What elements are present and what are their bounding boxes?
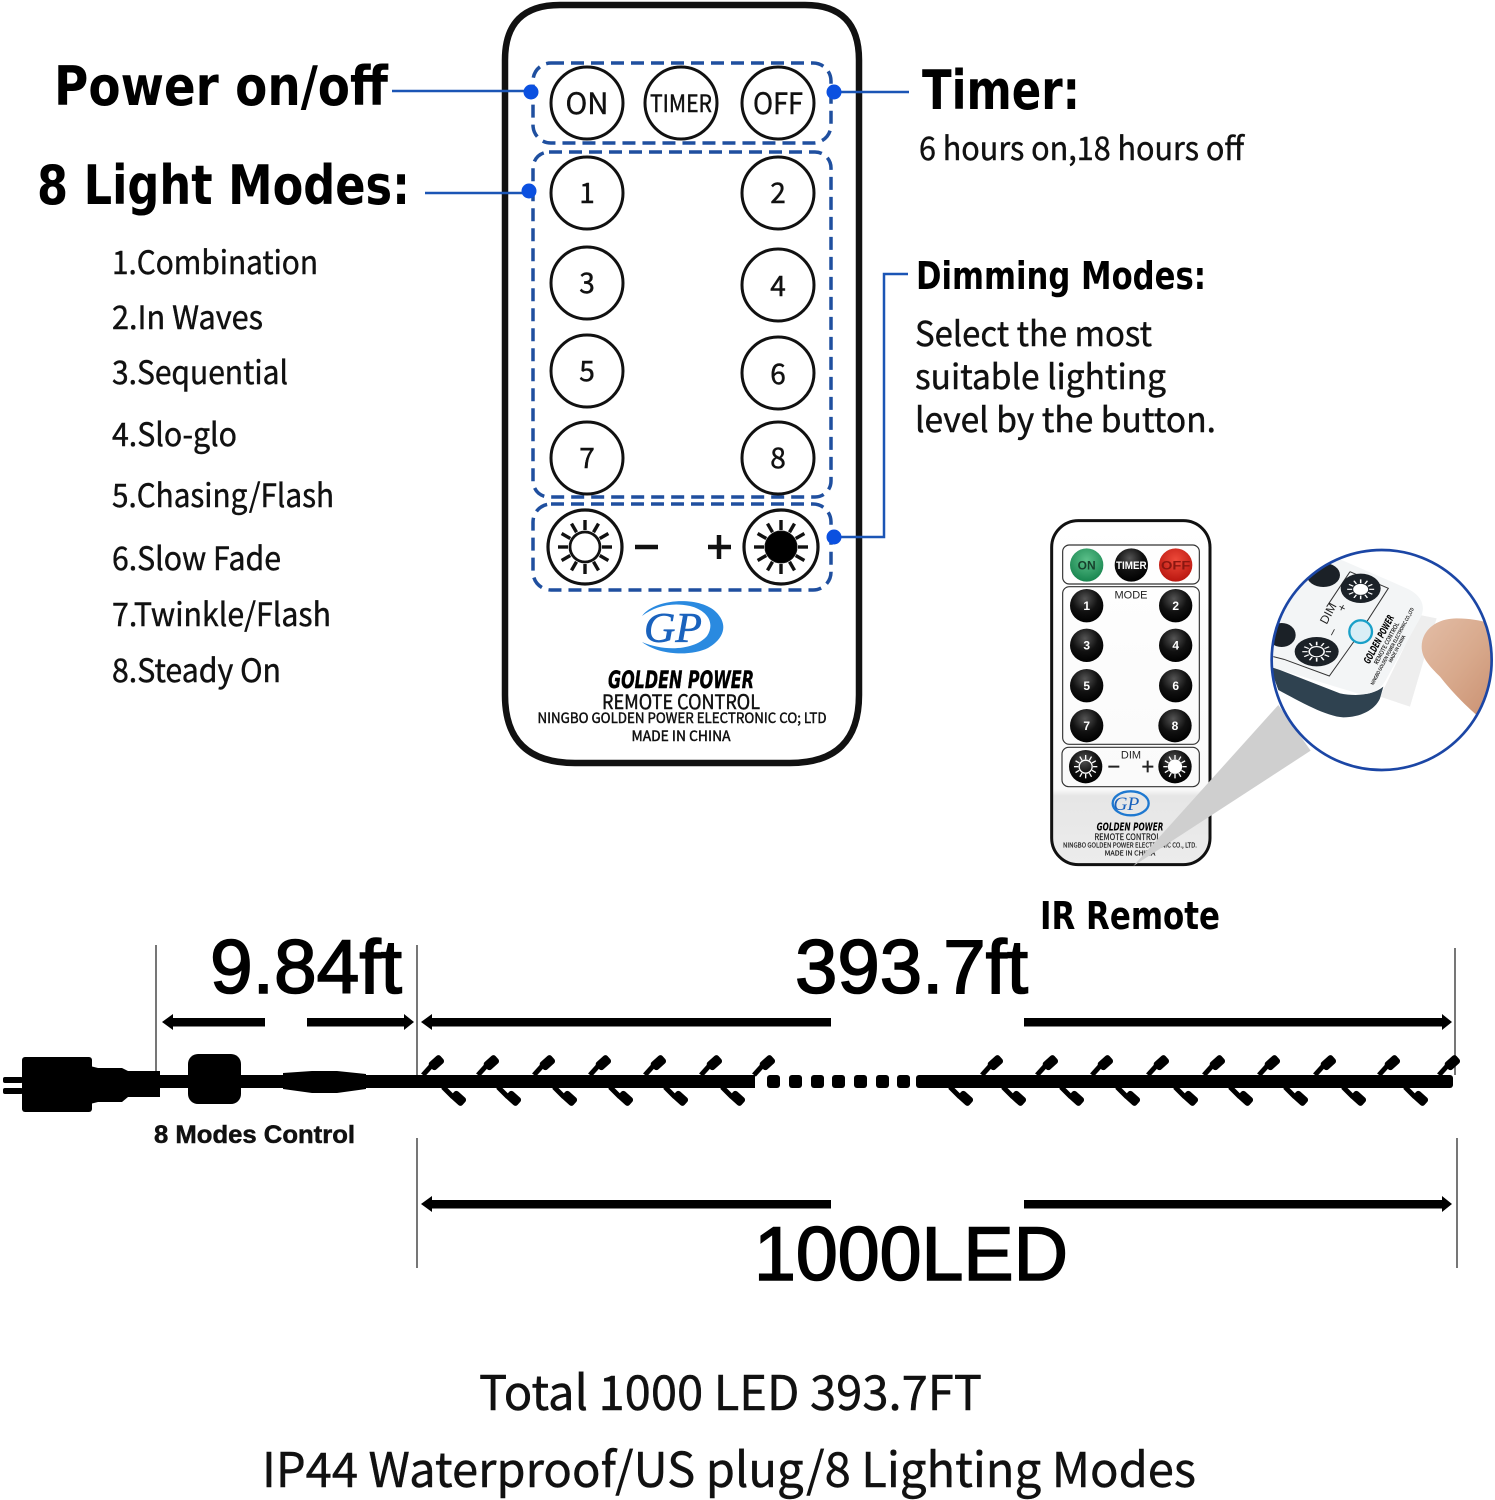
inset buttons — [1341, 574, 1381, 603]
button labels — [1078, 558, 1190, 761]
icon: dim up — [744, 510, 818, 584]
arrows: length dimension — [162, 1014, 1452, 1030]
brand text — [1063, 821, 1197, 857]
logo: GP — [642, 601, 723, 653]
power and timer buttons — [551, 67, 814, 139]
brand text: MADE IN CHINA — [1105, 847, 1156, 857]
mode numbers: 5 — [579, 350, 595, 390]
remote side — [1270, 667, 1383, 717]
list of light modes: 8.Steady On — [112, 646, 281, 692]
mode numbers: 7 — [579, 437, 595, 477]
mode numbers: 8 — [770, 437, 786, 477]
inset text: REMOTE CONTROL — [1371, 620, 1401, 666]
list of light modes: 6.Slow Fade — [112, 534, 281, 580]
dimming description: suitable lighting — [915, 350, 1166, 399]
button labels: 3 — [1083, 639, 1090, 653]
mode numbers — [579, 172, 786, 477]
inset panel — [1273, 572, 1388, 676]
power and timer labels: OFF — [753, 81, 803, 123]
dimming description: level by the button. — [915, 393, 1216, 442]
mode numbers: 4 — [770, 265, 786, 305]
button labels: 1 — [1083, 599, 1090, 613]
inset text — [1364, 608, 1414, 686]
mode numbers: 3 — [579, 262, 595, 302]
dimming description: Select the most — [915, 307, 1152, 356]
inset text: MADE IN CHINA — [1388, 634, 1407, 664]
control box — [188, 1054, 241, 1104]
list of light modes: 5.Chasing/Flash — [112, 471, 334, 517]
list of light modes: 4.Slo-glo — [112, 410, 237, 456]
LEDs right section — [950, 1054, 1461, 1107]
label: IR remote: IR Remote — [1040, 894, 1220, 938]
inset ring — [1272, 550, 1492, 770]
finger — [1422, 618, 1495, 715]
plug — [3, 1057, 160, 1112]
brand text: GOLDEN POWER — [1097, 821, 1163, 834]
logo — [1113, 791, 1149, 815]
list of light modes: 2.In Waves — [112, 293, 263, 339]
button labels: TIMER — [1116, 560, 1147, 572]
inset icons — [1302, 579, 1374, 662]
dim icons — [1074, 755, 1187, 778]
button labels: OFF — [1161, 558, 1190, 572]
zoom cone — [1133, 705, 1311, 866]
inset marks — [1320, 602, 1345, 636]
dotted gap — [767, 1075, 910, 1088]
button labels: MODE — [1115, 589, 1147, 601]
heading: power on/off: Power on/off — [54, 55, 389, 118]
inset marks: + — [1334, 601, 1350, 614]
large remote diagram — [505, 5, 859, 763]
heading: 8 light modes: 8 Light Modes: — [37, 154, 410, 217]
list of light modes: 1.Combination — [112, 238, 318, 284]
inset logo — [1349, 620, 1372, 643]
mode numbers: 1 — [579, 172, 595, 212]
summary line 2: IP44 Waterproof/US plug/8 Lighting Modes — [262, 1431, 1196, 1500]
coloured buttons — [1070, 548, 1103, 582]
summary line 1: Total 1000 LED 393.7FT — [479, 1354, 982, 1424]
small IR remote photo with inset — [1052, 521, 1495, 866]
dashed group: dimming — [533, 504, 831, 590]
dim minus plus — [1108, 761, 1153, 772]
list of light modes: 3.Sequential — [112, 348, 288, 394]
dimension guide lines — [156, 945, 1457, 1268]
remote body — [1052, 521, 1210, 865]
logo: GP: GP — [644, 606, 702, 652]
brand text: NINGBO GOLDEN POWER ELECTRONIC CO; LTD — [538, 708, 826, 728]
logo: GP — [1113, 794, 1139, 815]
dashed group: power and timer — [533, 63, 831, 143]
dimming description — [915, 307, 1216, 442]
icon: dim down — [548, 510, 622, 584]
inset marks: DIM — [1317, 600, 1340, 626]
mode buttons — [551, 157, 814, 494]
brand text — [538, 666, 826, 746]
brand text: GOLDEN POWER — [608, 666, 754, 694]
callout lines and dots — [392, 84, 909, 544]
brand text: MADE IN CHINA — [632, 726, 731, 746]
list of light modes: 7.Twinkle/Flash — [112, 590, 331, 636]
button labels: 4 — [1172, 639, 1179, 653]
inset text: NINGBO GOLDEN POWER ELECTRONIC CO.,LTD — [1370, 607, 1416, 686]
inset background — [1271, 549, 1492, 771]
power and timer labels: ON — [566, 81, 608, 123]
LEDs left section — [421, 1054, 776, 1107]
remote face — [1267, 553, 1423, 694]
dimension: 1000LED: 1000LED — [754, 1212, 1068, 1297]
light string diagram — [3, 1054, 1461, 1112]
dimension: 9.84ft: 9.84ft — [210, 925, 402, 1010]
inset text: GOLDEN POWER — [1362, 614, 1397, 666]
brand text: NINGBO GOLDEN POWER ELECTRONIC CO., LTD. — [1063, 839, 1197, 849]
white tape — [1380, 615, 1437, 707]
mode numbers: 6 — [770, 353, 786, 393]
timer description: 6 hours on,18 hours off — [919, 124, 1245, 170]
inline connector — [283, 1071, 366, 1093]
heading: timer: Timer: — [922, 59, 1080, 122]
minus and plus — [635, 535, 731, 559]
power and timer labels: TIMER — [650, 84, 712, 119]
power and timer labels — [566, 81, 803, 123]
inset marks: – — [1324, 625, 1340, 638]
dimension: 393.7ft: 393.7ft — [795, 925, 1028, 1010]
list of light modes — [112, 238, 334, 692]
button labels: 5 — [1083, 679, 1090, 693]
black buttons — [1069, 589, 1192, 783]
button labels: DIM — [1121, 749, 1141, 761]
button groups — [1062, 545, 1199, 787]
remote body — [505, 5, 859, 763]
button labels: 2 — [1172, 599, 1179, 613]
wire right — [916, 1075, 1453, 1088]
arrows: LED count dimension — [421, 1196, 1452, 1212]
brand text: REMOTE CONTROL — [602, 686, 760, 715]
magnified inset — [1273, 560, 1490, 718]
wire — [155, 1075, 755, 1088]
dashed group: modes — [533, 152, 831, 497]
button labels: ON — [1078, 558, 1096, 572]
label: 8 modes control: 8 Modes Control — [154, 1121, 355, 1149]
brand text: REMOTE CONTROL — [1094, 831, 1161, 843]
heading: dimming modes: Dimming Modes: — [916, 254, 1206, 298]
mode numbers: 2 — [770, 172, 786, 212]
button labels: 8 — [1172, 719, 1179, 733]
button labels: 6 — [1172, 679, 1179, 693]
button labels: 7 — [1083, 719, 1090, 733]
